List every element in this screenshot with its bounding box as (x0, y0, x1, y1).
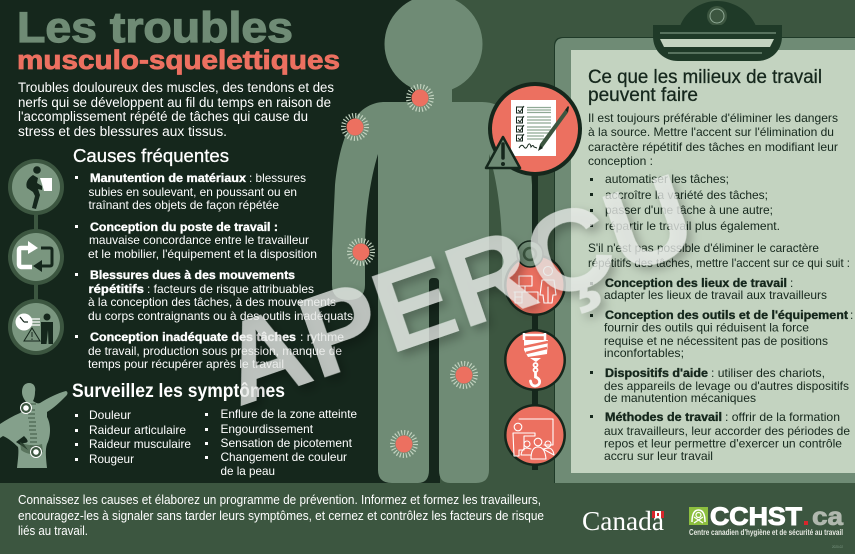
logo: CCHST.ca: CCHST (710, 503, 802, 531)
list: symptoms column 2: de la peau (220, 464, 275, 478)
list: symptoms column 2: Changement de couleur (220, 450, 347, 464)
panel: causes list: du corps contraignants ou à des outils inadéquats (88, 309, 353, 323)
list: controls: repos et leur permettre d'exercer un contrôle (604, 436, 842, 450)
panel: causes list: : rythme (300, 330, 344, 344)
panel: causes list: Manutention de matériaux (90, 171, 246, 185)
list: controls: Conception des lieux de travail (605, 276, 787, 290)
list: symptoms column 1: Rougeur (89, 452, 134, 466)
heading: causes: Causes fréquentes (73, 146, 229, 166)
list: controls: adapter les lieux de travail aux travailleurs (604, 288, 827, 302)
list: controls: aux travailleurs, leur accorder des périodes de (604, 424, 850, 438)
heading: workplace actions (588, 66, 822, 106)
title: musculo-squelettiques (17, 45, 340, 75)
list: controls: de manutention mécaniques (604, 391, 756, 405)
footer text: encouragez-les à signaler sans tarder leurs symptômes, et cernez et contrôlez les facteurs de risque (18, 508, 544, 523)
list: controls: accru sur leur travail (604, 449, 713, 463)
icon: back with pain points (0, 383, 68, 468)
panel: workplace actions text (588, 66, 853, 463)
panel: causes list: traînant des objets de façon répétée (88, 198, 279, 212)
panel: causes list: Conception inadéquate des tâches (90, 330, 296, 344)
list: task changes: passer d'une tâche à une autre; (605, 203, 773, 217)
clipboard clip (653, 1, 782, 61)
intro text block (18, 80, 334, 139)
intro text block: nerfs qui se développent au fil du temps en raison de (18, 95, 331, 110)
panel: causes list: à la conception des tâches, à des mouvements (88, 295, 336, 309)
connector for right icons (532, 170, 538, 470)
footer band (0, 483, 855, 554)
intro text block: stress et des blessures aux tissus. (18, 124, 227, 139)
panel: causes list: Blessures dues à des mouvements (90, 268, 295, 282)
icon: checklist and pen (486, 82, 582, 176)
heading: workplace actions: peuvent faire (588, 84, 698, 106)
icon: clock, warning and worker (8, 299, 64, 355)
watermark: preview: APERÇU (204, 148, 709, 431)
icon: warning triangle (486, 137, 520, 168)
panel: causes list: Conception du poste de travail : (90, 220, 278, 234)
list: symptoms column 2: Engourdissement (220, 422, 314, 436)
list: task changes: accroître la variété des tâches; (605, 188, 768, 202)
pain spots on body (344, 86, 476, 456)
panel: causes list: mauvaise concordance entre le travailleur (89, 233, 309, 247)
footer text: liés au travail. (18, 523, 88, 538)
list: symptoms column 2: Enflure de la zone atteinte (220, 407, 357, 421)
list: symptoms column 1: Raideur musculaire (89, 437, 191, 451)
title (17, 4, 340, 75)
text block: if not possible: S'il n'est pas possible d'éliminer le caractère (588, 241, 819, 255)
text block: eliminate hazards: caractère répétitif des tâches en modifiant leur (588, 140, 838, 154)
list: controls: fournir des outils qui réduisent la force (604, 320, 809, 334)
list: symptoms column 2: Sensation de picotement (220, 436, 353, 450)
icon: repeat arrows (8, 229, 64, 285)
list: controls: Dispositifs d'aide (605, 366, 708, 380)
list: symptoms column 2 (205, 407, 357, 478)
list: task changes: répartir le travail plus également. (605, 219, 780, 233)
list: symptoms column 1: Douleur (89, 408, 131, 422)
intro text block: Troubles douloureux des muscles, des tendons et des (18, 80, 334, 95)
panel: causes list: : facteurs de risque attribuables (147, 282, 314, 296)
text block: eliminate hazards: Il est toujours préférable d'éliminer les dangers (588, 111, 838, 125)
panel: causes list: : blessures (249, 171, 306, 185)
text block: eliminate hazards (588, 111, 838, 168)
intro text block: l'accomplissement répété de tâches qui cause du (18, 109, 308, 124)
list: symptoms column 1: Raideur articulaire (89, 423, 186, 437)
footer text: Connaissez les causes et élaborez un programme de prévention. Informez et formez les travailleurs, (18, 492, 541, 507)
left icon chain (8, 159, 64, 355)
list: controls: Conception des outils et de l'équipement (605, 308, 848, 322)
list: controls: inconfortables; (604, 346, 684, 360)
list: controls: requise et ne nécessitent pas de positions (604, 334, 828, 348)
list: controls: Méthodes de travail (605, 410, 722, 424)
panel: causes list: subies en soulevant, en poussant ou en (88, 185, 297, 199)
list: controls: : offrir de la formation (725, 410, 840, 424)
list: controls: : utiliser des chariots, (711, 366, 825, 380)
icon: training presentation (504, 404, 566, 466)
logo: CCHST.ca: ca (812, 503, 844, 531)
text block: eliminate hazards: conception : (588, 154, 653, 168)
heading: workplace actions: Ce que les milieux de travail (588, 66, 822, 88)
logo: CCHST.ca (689, 503, 844, 549)
list: controls (590, 276, 853, 463)
panel: clipboard (554, 1, 855, 483)
icon: crane hook (504, 329, 566, 391)
heading: symptoms: Surveillez les symptômes (72, 380, 285, 402)
list: controls: des appareils de levage ou d'autres dispositifs (604, 379, 849, 393)
list: task changes (590, 172, 780, 233)
logo: CCHST.ca: 2020-02 (832, 544, 844, 549)
body silhouette (332, 0, 535, 483)
logo: Canada wordmark: Canada (582, 506, 664, 536)
panel: causes list: et le mobilier, l'équipement et la disposition (88, 247, 317, 261)
panel: causes list: temps pour récupérer après le travail (88, 357, 284, 371)
text block: if not possible (588, 241, 850, 270)
title: Les troubles (17, 4, 293, 52)
text block: eliminate hazards: à la source. Mettre l'accent sur l'élimination du (588, 125, 834, 139)
panel: causes list (75, 171, 353, 371)
icon: workstation design (504, 254, 566, 316)
icon: lifting a box (8, 159, 64, 215)
footer text (18, 492, 544, 538)
icon: settings gear (517, 241, 543, 267)
panel: causes list: de travail, production sous pression, manque de (88, 344, 342, 358)
list: controls: : (790, 276, 793, 290)
text block: if not possible: répétitifs des tâches, mettre l'accent sur ce qui suit : (588, 256, 850, 270)
panel: causes list: répétitifs (88, 282, 144, 296)
list: controls: : (850, 308, 853, 322)
list: task changes: automatiser les tâches; (605, 172, 729, 186)
list: symptoms column 1 (75, 408, 191, 466)
